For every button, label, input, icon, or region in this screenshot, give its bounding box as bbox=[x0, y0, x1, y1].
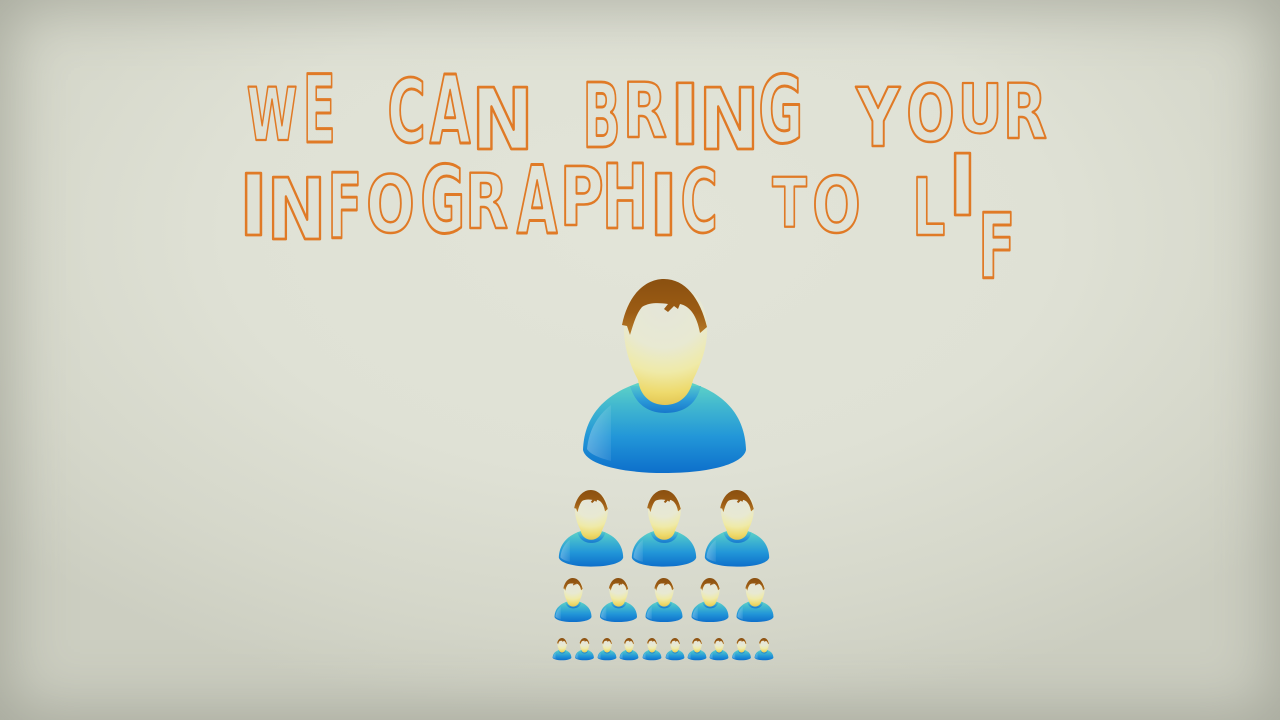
title line 1: WE CAN BRING YOUR: N bbox=[471, 70, 534, 169]
title line 2: INFOGRAPHIC TO LIF: I bbox=[649, 157, 678, 256]
icon row: five small people bbox=[554, 578, 774, 622]
title line 2: INFOGRAPHIC TO LIF: I bbox=[948, 137, 977, 236]
title line 1: WE CAN BRING YOUR: R bbox=[623, 67, 667, 155]
title line 2: INFOGRAPHIC TO LIF: A bbox=[517, 147, 558, 255]
icon row: ten tiny people bbox=[553, 638, 773, 660]
title line 1: WE CAN BRING YOUR: Y bbox=[855, 71, 901, 165]
title line 2: INFOGRAPHIC TO LIF: G bbox=[420, 146, 465, 254]
title line 2: INFOGRAPHIC TO LIF: P bbox=[560, 150, 604, 244]
title line 1: WE CAN BRING YOUR: B bbox=[582, 66, 621, 169]
title line 1: WE CAN BRING YOUR: E bbox=[303, 55, 336, 165]
icon row: three medium people bbox=[559, 490, 769, 567]
title line 2: INFOGRAPHIC TO LIF: O bbox=[366, 160, 415, 251]
title line 2: INFOGRAPHIC TO LIF: C bbox=[680, 151, 718, 253]
title line 1: WE CAN BRING YOUR: I bbox=[669, 66, 701, 164]
title line 1: WE CAN BRING YOUR: R bbox=[1003, 68, 1047, 156]
title line 1: WE CAN BRING YOUR bbox=[247, 55, 1047, 169]
title line 1: WE CAN BRING YOUR: O bbox=[906, 69, 955, 160]
title line 1: WE CAN BRING YOUR: A bbox=[430, 56, 470, 166]
title line 2: INFOGRAPHIC TO LIF: L bbox=[912, 162, 945, 254]
title line 2: INFOGRAPHIC TO LIF: N bbox=[266, 160, 327, 260]
title bbox=[239, 55, 1047, 300]
title line 1: WE CAN BRING YOUR: C bbox=[387, 61, 426, 163]
title line 1: WE CAN BRING YOUR: W bbox=[247, 74, 297, 158]
title line 2: INFOGRAPHIC TO LIF: F bbox=[978, 194, 1015, 300]
title line 2: INFOGRAPHIC TO LIF: T bbox=[772, 164, 807, 244]
title line 2: INFOGRAPHIC TO LIF: R bbox=[465, 158, 508, 246]
title line 1: WE CAN BRING YOUR: U bbox=[958, 70, 1003, 149]
title line 1: WE CAN BRING YOUR: G bbox=[758, 56, 803, 164]
title line 1: WE CAN BRING YOUR: N bbox=[698, 70, 760, 169]
title line 2: INFOGRAPHIC TO LIF bbox=[239, 137, 1015, 300]
title line 2: INFOGRAPHIC TO LIF: F bbox=[327, 155, 362, 260]
title line 2: INFOGRAPHIC TO LIF: H bbox=[602, 146, 648, 250]
title line 2: INFOGRAPHIC TO LIF: O bbox=[812, 161, 861, 250]
icon: large person bbox=[583, 279, 746, 473]
title line 2: INFOGRAPHIC TO LIF: I bbox=[239, 157, 268, 256]
